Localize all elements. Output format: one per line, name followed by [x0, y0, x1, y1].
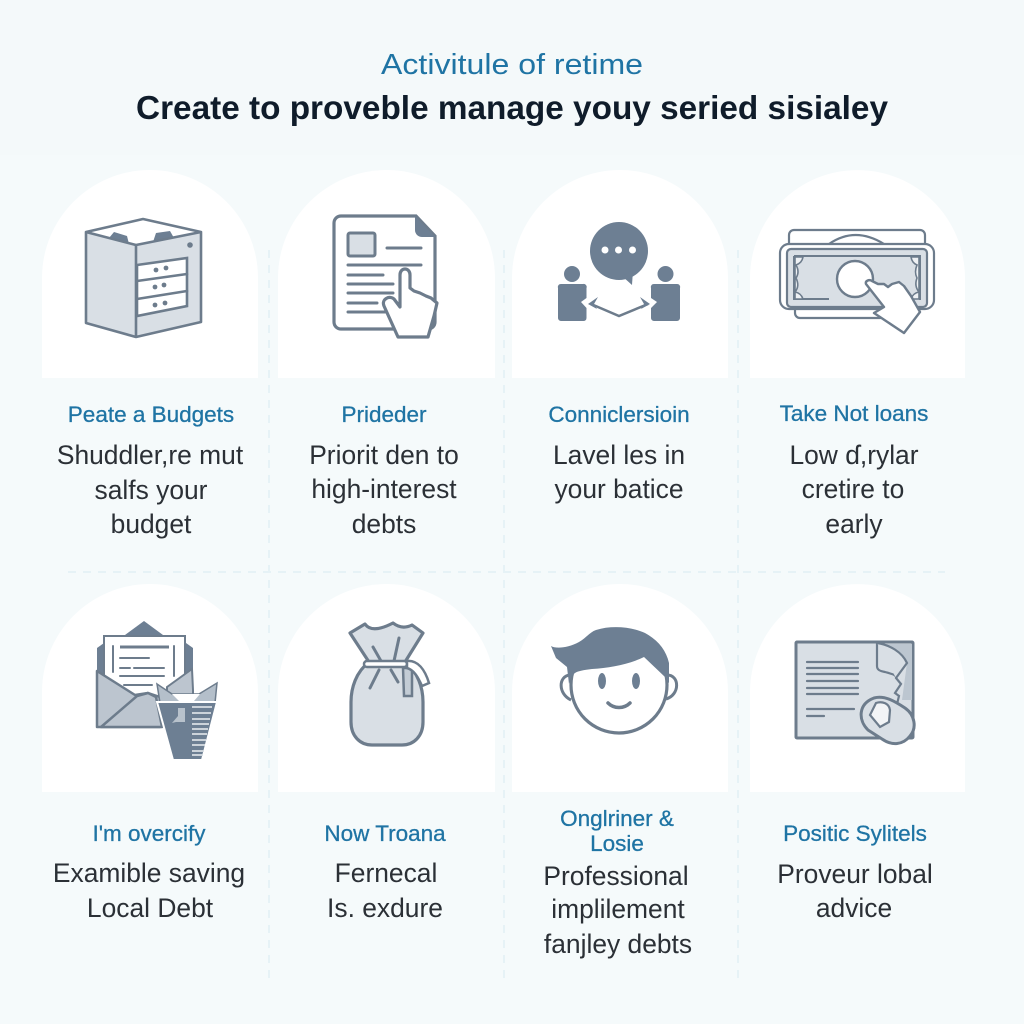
- arch background: [278, 584, 495, 792]
- icon: two people talking: [558, 222, 680, 321]
- heading: Prideder: [341, 402, 427, 427]
- heading: [560, 806, 674, 856]
- description: Professional: [543, 861, 689, 891]
- description: budget: [111, 509, 192, 539]
- description: [553, 440, 685, 504]
- description: debts: [352, 509, 416, 539]
- description: cretire to: [802, 474, 904, 504]
- description: Shuddler,re mut: [57, 440, 244, 470]
- panel: budgets: [42, 170, 258, 539]
- heading: Onglriner &: [560, 806, 674, 831]
- arch background: [42, 170, 258, 378]
- icon: smiling face: [551, 627, 677, 733]
- arch background: [278, 170, 495, 378]
- heading: Peate a Budgets: [68, 402, 234, 427]
- description: Is. exdure: [327, 893, 443, 923]
- description: fanjley debts: [544, 929, 692, 959]
- icon: certificate with hand: [796, 642, 914, 744]
- arch background: [512, 584, 728, 792]
- icon: money bag: [350, 623, 429, 745]
- heading: Take Not loans: [780, 401, 928, 426]
- icon: document with pointing hand: [334, 216, 437, 337]
- icon: envelope and newspaper: [97, 621, 217, 760]
- description: implilement: [551, 894, 685, 924]
- description: salfs your: [95, 475, 208, 505]
- description: Local Debt: [87, 893, 214, 923]
- icon: banknote with hand: [780, 230, 934, 333]
- description: advice: [816, 893, 892, 923]
- description: your batice: [554, 474, 684, 504]
- icon: filing box: [86, 219, 201, 337]
- description: [309, 440, 459, 539]
- description: Fernecal: [335, 858, 437, 888]
- panel: professional: [512, 584, 728, 959]
- arch background: [512, 170, 728, 378]
- description: [789, 440, 919, 539]
- description: [57, 440, 244, 539]
- description: [53, 858, 245, 923]
- panel: loans: [750, 170, 965, 539]
- heading: I'm overcify: [92, 821, 206, 846]
- description: Examible saving: [53, 858, 245, 888]
- description: high-interest: [311, 474, 457, 504]
- arch background: [750, 170, 965, 378]
- panel: conversation: [512, 170, 728, 504]
- title: subtitle line: Activitule of retime: [381, 49, 643, 81]
- description: early: [825, 509, 883, 539]
- heading: Now Troana: [324, 821, 446, 846]
- description: Low ɗ,rylar: [789, 440, 919, 470]
- heading: Losie: [590, 831, 644, 856]
- panel: prioritize: [278, 170, 495, 539]
- heading: Positic Sylitels: [783, 821, 927, 846]
- arch background: [750, 584, 965, 792]
- heading: Conniclersioin: [548, 402, 690, 427]
- title: main heading: Create to proveble manage youy seried sisialey: [136, 89, 889, 126]
- panel: overdraft: [42, 584, 258, 923]
- description: [777, 859, 933, 923]
- description: [327, 858, 443, 923]
- header: [136, 49, 889, 126]
- panel: savings bag: [278, 584, 495, 923]
- panel: advice: [750, 584, 965, 923]
- description: [543, 861, 692, 959]
- description: Proveur lobal: [777, 859, 933, 889]
- arch background: [42, 584, 258, 792]
- description: Lavel les in: [553, 440, 685, 470]
- description: Priorit den to: [309, 440, 459, 470]
